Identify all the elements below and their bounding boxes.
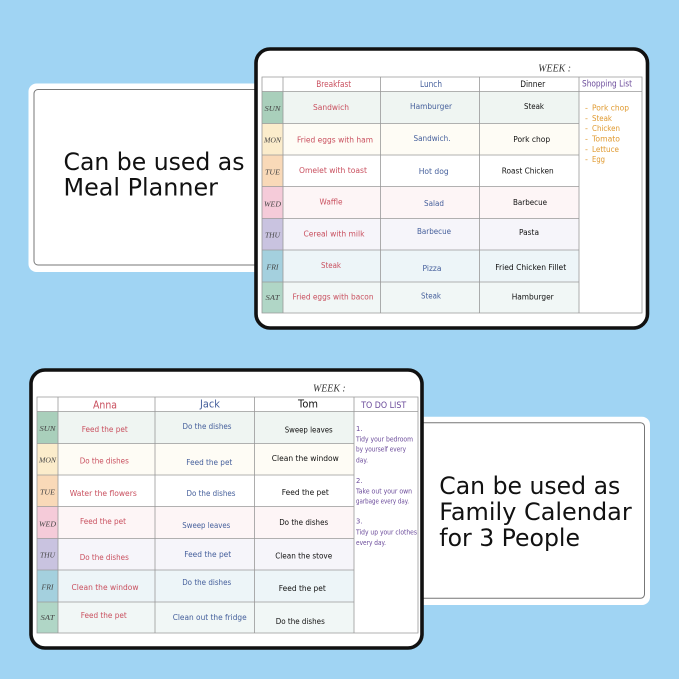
panel: meal planner caption card	[28, 84, 269, 272]
heading: can be used as meal planner: Meal Planner	[64, 173, 218, 202]
shopping list: Tomato	[591, 134, 620, 144]
anna entries: Do the dishes	[80, 456, 129, 466]
shopping list: -	[585, 154, 588, 164]
day labels: THU	[265, 231, 280, 240]
day labels: SAT	[40, 613, 55, 622]
shopping list: Egg	[592, 154, 605, 164]
tom entries: Do the dishes	[276, 616, 325, 626]
lunch entries: Barbecue	[417, 226, 451, 236]
chart: family calendar table	[37, 397, 418, 633]
day labels: TUE	[265, 167, 280, 176]
heading: can be used as family calendar for 3 people: for 3 People	[439, 523, 580, 552]
shopping list: Pork chop	[592, 102, 629, 112]
table header row	[316, 80, 633, 90]
dinner entries: Pasta	[519, 227, 539, 237]
heading: can be used as meal planner	[64, 147, 244, 202]
shopping list: -	[585, 123, 588, 133]
shopping list: -	[585, 134, 588, 144]
dinner entries: Barbecue	[513, 197, 547, 207]
dinner entries: Fried Chicken Fillet	[495, 262, 567, 272]
table header row: Dinner	[520, 80, 546, 90]
jack entries: Feed the pet	[186, 457, 233, 467]
heading: can be used as meal planner: Can be used as	[64, 147, 244, 176]
anna entries	[70, 424, 139, 620]
day labels: WED	[39, 519, 57, 528]
shopping list: Chicken	[592, 123, 620, 133]
jack entries: Do the dishes	[182, 577, 231, 587]
breakfast entries: Fried eggs with bacon	[292, 292, 374, 302]
tom entries: Do the dishes	[279, 517, 328, 527]
day labels	[38, 424, 57, 622]
to do list: by yourself every	[356, 446, 406, 454]
shopping list: -	[585, 144, 588, 154]
dinner entries: Steak	[524, 101, 544, 111]
table header row: Breakfast	[316, 80, 352, 90]
tom entries: Clean the window	[272, 453, 339, 463]
anna entries: Do the dishes	[80, 552, 129, 562]
day labels: FRI	[40, 582, 54, 591]
lunch entries: Sandwich.	[414, 133, 450, 143]
shopping list	[585, 102, 629, 164]
breakfast entries	[292, 102, 374, 302]
jack entries: Do the dishes	[182, 421, 232, 431]
to do list: garbage every day.	[356, 498, 409, 506]
lunch entries: Hamburger	[410, 101, 453, 111]
table header row: Anna	[93, 400, 117, 412]
day labels: TUE	[40, 487, 55, 496]
lunch entries: Pizza	[422, 263, 442, 273]
shopping list: -	[585, 113, 588, 123]
jack entries: Clean out the fridge	[173, 612, 247, 622]
breakfast entries: Omelet with toast	[299, 165, 368, 175]
label: week: WEEK :	[538, 64, 571, 74]
tom entries: Feed the pet	[279, 583, 327, 593]
breakfast entries: Waffle	[320, 196, 342, 206]
to do list: Tidy your bedroom	[355, 435, 413, 443]
day labels: SUN	[264, 104, 282, 113]
lunch entries: Hot dog	[419, 166, 449, 176]
to do list: 2.	[356, 477, 362, 485]
to do list: Take out your own	[355, 487, 412, 495]
anna entries: Clean the window	[72, 582, 139, 592]
to do list: day.	[356, 456, 368, 464]
breakfast entries: Fried eggs with ham	[297, 134, 373, 144]
table header row: Lunch	[420, 80, 442, 90]
table header row: Shopping List	[582, 80, 633, 90]
day labels: MON	[38, 455, 57, 464]
to do list: Tidy up your clothes	[355, 529, 417, 537]
shopping list: -	[585, 102, 588, 112]
tom entries: Clean the stove	[275, 550, 332, 560]
tom entries	[272, 424, 339, 626]
table header row	[93, 398, 407, 412]
lunch entries: Steak	[421, 290, 441, 300]
lunch entries: Salad	[424, 198, 444, 208]
dinner entries: Hamburger	[512, 292, 554, 302]
day labels: SAT	[266, 293, 280, 302]
breakfast entries: Cereal with milk	[304, 228, 365, 238]
dinner entries: Roast Chicken	[502, 166, 554, 176]
panel: family calendar whiteboard	[31, 370, 422, 648]
heading: can be used as family calendar for 3 people: Can be used as	[439, 471, 620, 500]
chart: meal planner table	[262, 77, 642, 313]
panel: family calendar caption card	[409, 417, 650, 605]
to do list: 3.	[356, 518, 362, 526]
day labels: THU	[40, 551, 55, 560]
label: week: WEEK :	[313, 384, 346, 394]
dinner entries: Pork chop	[513, 134, 550, 144]
jack entries: Sweep leaves	[182, 520, 230, 530]
anna entries: Water the flowers	[70, 488, 137, 498]
tom entries: Sweep leaves	[285, 424, 333, 434]
dinner entries	[495, 101, 567, 302]
lunch entries	[410, 101, 453, 300]
jack entries	[173, 421, 247, 622]
shopping list: Lettuce	[592, 144, 619, 154]
jack entries: Feed the pet	[184, 549, 232, 559]
tom entries: Feed the pet	[282, 487, 330, 497]
anna entries: Feed the pet	[81, 610, 127, 620]
table header row: Tom	[297, 398, 318, 410]
anna entries: Feed the pet	[82, 424, 128, 434]
jack entries: Do the dishes	[186, 488, 236, 498]
to do list: every day.	[356, 539, 386, 547]
breakfast entries: Steak	[321, 260, 341, 270]
day labels: MON	[263, 135, 282, 144]
heading: can be used as family calendar for 3 people	[439, 471, 632, 552]
day labels	[263, 104, 282, 302]
breakfast entries: Sandwich	[313, 102, 349, 112]
to do list	[355, 425, 417, 547]
shopping list: Steak	[592, 113, 612, 123]
to do list: 1.	[356, 425, 362, 433]
day labels: FRI	[265, 262, 279, 271]
panel: meal planner whiteboard	[256, 49, 648, 328]
anna entries: Feed the pet	[80, 516, 127, 526]
heading: can be used as family calendar for 3 people: Family Calendar	[439, 497, 632, 526]
table header row: TO DO LIST	[360, 401, 407, 411]
day labels: WED	[264, 199, 282, 208]
table header row: Jack	[199, 398, 221, 410]
day labels: SUN	[40, 424, 57, 433]
